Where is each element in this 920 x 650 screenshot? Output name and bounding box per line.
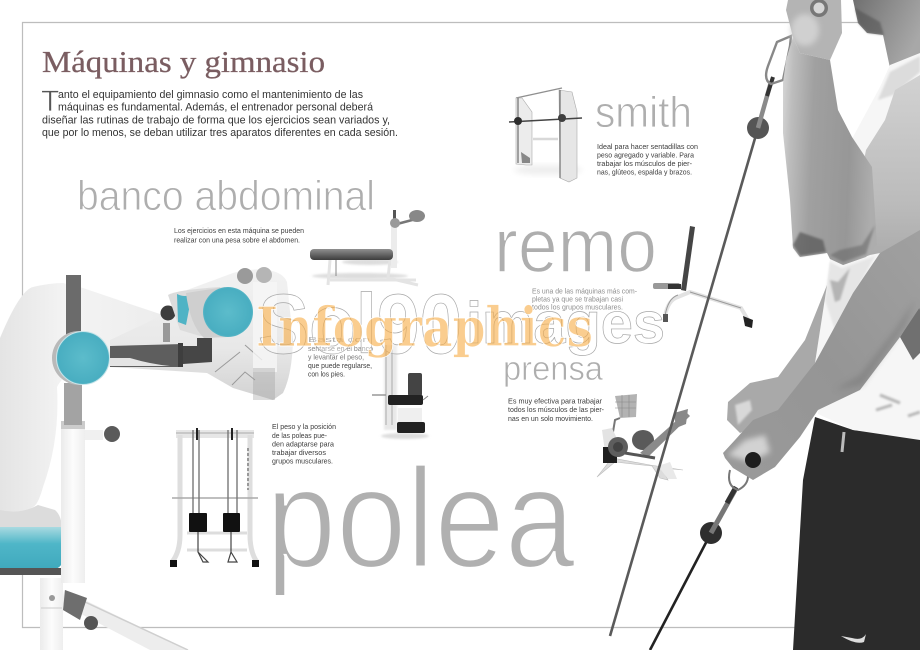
raised forearm <box>783 37 877 265</box>
caption: polea <box>272 422 336 466</box>
leg upper <box>0 283 170 527</box>
neck <box>853 0 920 68</box>
caption: banco abdominal: realizar con una pesa sobre el abdomen. <box>174 236 300 244</box>
forearm shadow <box>835 300 915 390</box>
caption: remo: pletas ya que se trabajan casi <box>532 294 623 304</box>
caption: smith <box>597 142 698 176</box>
knee roller <box>52 331 106 385</box>
white post and knob <box>61 421 120 583</box>
caption: remo <box>532 286 637 312</box>
caption: smith: trabajar los músculos de pier- <box>597 159 692 168</box>
machine: polea <box>170 428 259 567</box>
heading: smith: smith <box>595 88 692 137</box>
dark triangle <box>900 305 920 360</box>
watermark: Sol90images: Sol90 <box>258 277 462 371</box>
heading: banco abdominal: banco abdominal <box>77 172 375 219</box>
lower cable <box>650 470 748 650</box>
upper carabiner <box>766 36 791 84</box>
elbow shadow <box>793 232 826 256</box>
fist highlight <box>791 14 819 46</box>
cable rod <box>610 77 773 636</box>
rear forearm and hand <box>727 285 827 433</box>
caption: prensa <box>508 396 604 423</box>
intro text block: anto el equipamiento del gimnasio como el mantenimiento de las <box>58 89 363 101</box>
leg machine illustration <box>0 267 293 650</box>
caption: polea: trabajar diversos <box>272 448 326 457</box>
machine: extensión de piernas <box>372 345 429 439</box>
caption: prensa: todos los músculos de las pier- <box>508 405 604 414</box>
zipper <box>842 432 844 452</box>
intro text block: que por lo menos, se deban utilizar tres aparatos diferentes en cada sesión. <box>42 127 398 139</box>
handle <box>745 452 761 468</box>
machine: prensa <box>597 394 690 480</box>
caption: prensa: nas en un solo movimiento. <box>508 414 593 423</box>
post lower and diagonal bar <box>40 578 188 650</box>
watermark: Sol90images: images <box>466 291 665 356</box>
heading: remo: remo <box>494 203 657 289</box>
caption: polea: de las poleas pue- <box>272 431 327 440</box>
caption: polea: El peso y la posición <box>272 422 336 431</box>
caption: polea: grupos musculares. <box>272 456 333 466</box>
heading: polea: polea <box>266 439 575 598</box>
shirt <box>815 53 920 440</box>
caption: extensión de piernas: que puede regularse, <box>308 361 372 370</box>
intro text block: diseñar las rutinas de trabajo de forma que los ejercicios sean variados y, <box>42 114 390 126</box>
machine: banco abdominal <box>310 210 425 285</box>
caption: smith: nas, glúteos, espalda y brazos. <box>597 168 692 176</box>
foot roller <box>168 287 253 338</box>
watermark: Sol90images <box>258 277 665 371</box>
roller arm <box>110 306 212 367</box>
caption: extensión de piernas: sentarse en el banco <box>308 344 373 353</box>
caption: smith: Ideal para hacer sentadillas con <box>597 142 698 151</box>
jaw shadow <box>855 8 884 35</box>
caption: smith: peso agregado y variable. Para <box>597 150 695 160</box>
drop cap: T <box>41 85 59 118</box>
gray column <box>64 275 82 425</box>
machine: remo <box>653 226 753 328</box>
caption: remo: Es una de las máquinas más com- <box>532 286 637 296</box>
caption: prensa: Es muy efectiva para trabajar <box>508 396 602 406</box>
caption: extensión de piernas: Basta con <box>308 335 370 344</box>
front forearm <box>723 230 920 480</box>
lower leg and foot <box>110 269 293 400</box>
pants logo <box>841 634 866 643</box>
caption: extensión de piernas: y levantar el peso, <box>308 352 364 362</box>
title: Máquinas y gimnasio <box>42 44 325 79</box>
knee roller cap <box>56 332 110 384</box>
knuckle highlight <box>735 400 752 425</box>
man <box>723 0 920 650</box>
shirt shading <box>825 256 875 330</box>
heading: prensa: prensa <box>503 350 603 388</box>
hand highlight <box>728 435 770 462</box>
machine: smith <box>509 88 582 182</box>
intro text block <box>41 85 398 139</box>
caption: remo: todos los grupos musculares. <box>532 302 623 312</box>
caption: extensión de piernas <box>308 335 373 378</box>
shoulder and upper arm <box>843 75 920 310</box>
pants <box>793 417 920 650</box>
watermark: Infographics: Infographics <box>256 295 593 359</box>
shirt fold <box>878 56 920 100</box>
caption: banco abdominal <box>174 226 304 244</box>
caption: polea: den adaptarse para <box>272 440 335 448</box>
handle ring <box>810 0 828 17</box>
caption: extensión de piernas: con los pies. <box>308 370 345 378</box>
intro text block: máquinas es fundamental. Además, el entrenador personal deberá <box>58 102 374 114</box>
caption: banco abdominal: Los ejercicios en esta máquina se pueden <box>174 226 304 235</box>
raised fist <box>786 0 842 60</box>
seat <box>0 505 62 575</box>
